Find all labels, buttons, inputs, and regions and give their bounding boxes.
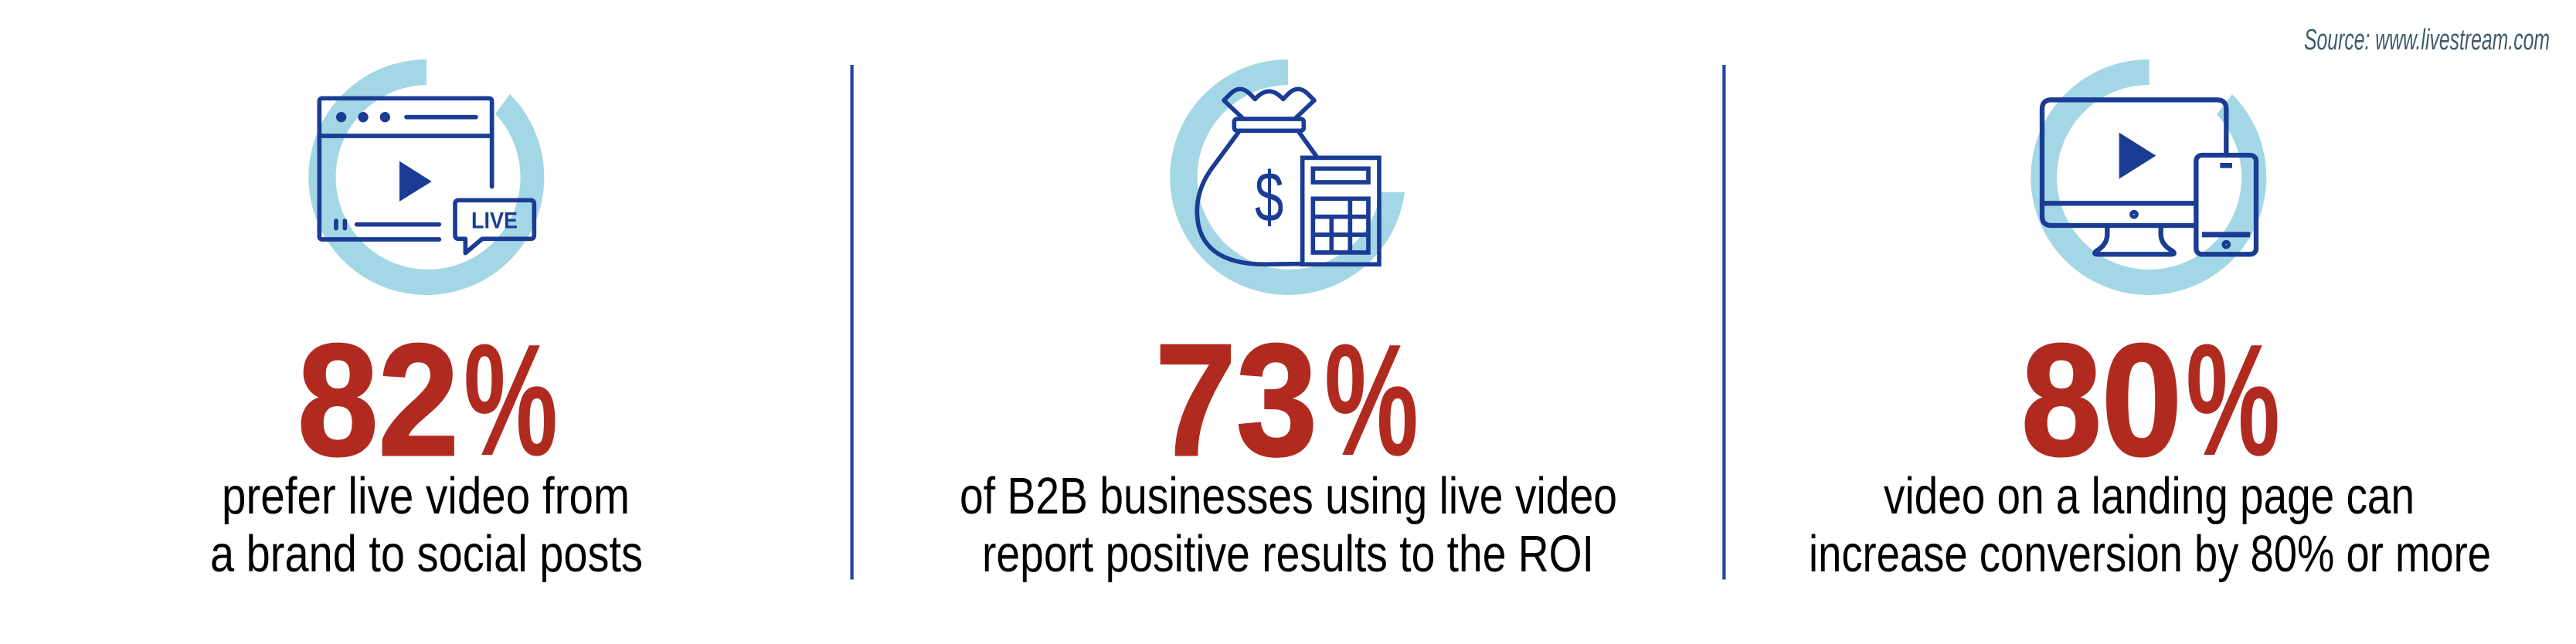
progress ring [308,59,544,295]
panel: B2B ROI [960,59,1617,583]
description: prefer live video from [222,467,630,525]
description [1809,467,2491,583]
description [210,467,643,583]
progress ring [1170,59,1405,295]
icon: live video browser window [308,59,544,295]
panel: live video preference [210,59,643,583]
statistic: 82%: 82 [297,311,459,489]
browser window with play button and live bubble: LIVE [471,208,518,234]
statistic: 80%: 80 [2021,311,2182,489]
statistic: 82% [297,311,558,489]
description: of B2B businesses using live video [960,467,1617,525]
description: a brand to social posts [210,525,643,583]
description [960,467,1617,583]
statistic: 80% [2021,311,2280,489]
statistic: 73% [1155,311,1419,489]
icon: money bag and calculator [1170,59,1405,295]
progress ring [2031,59,2266,295]
monitor and phone drawing [2042,100,2256,254]
statistic: 80%: % [2186,311,2280,489]
description: report positive results to the ROI [982,525,1594,583]
statistic: 82%: % [464,311,558,489]
browser window with play button and live bubble [319,98,534,253]
description: video on a landing page can [1884,467,2415,525]
icon: desktop monitor and phone [2031,59,2266,295]
statistic: 73%: 73 [1155,311,1317,489]
panel: landing page conversion [1809,59,2491,583]
statistic: 73%: % [1324,311,1419,489]
money bag and calculator drawing [1197,89,1379,264]
money bag and calculator drawing: $ [1255,158,1283,237]
